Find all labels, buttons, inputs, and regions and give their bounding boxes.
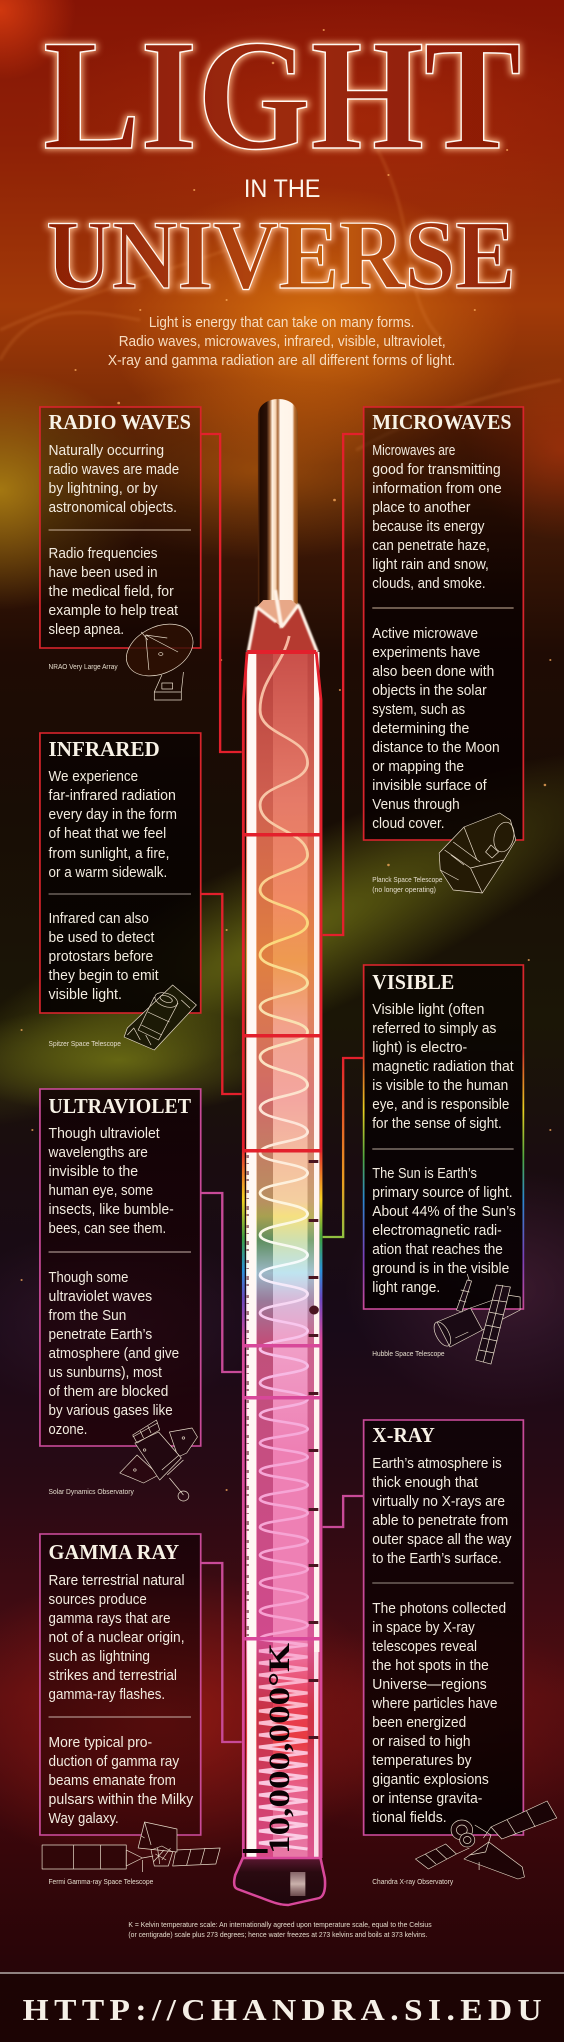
panel: radio waves — [40, 407, 203, 700]
text block: magnetic radiation that — [372, 1059, 514, 1075]
text block — [372, 443, 514, 832]
text block: far-infrared radiation — [49, 788, 176, 804]
text block: astronomical objects. — [49, 500, 177, 516]
icon: Fermi telescope — [42, 1822, 220, 1872]
base highlight — [290, 1872, 305, 1896]
text block — [371, 1456, 514, 1826]
heading: MICROWAVES — [372, 411, 511, 434]
heading: GAMMA RAY — [49, 1541, 179, 1564]
text block: gamma-ray flashes. — [49, 1687, 165, 1703]
intro text: Radio waves, microwaves, infrared, visible, ultraviolet, — [119, 334, 446, 350]
panel: ultraviolet — [40, 1089, 201, 1501]
thermometer with wave — [234, 399, 325, 1905]
text block: be used to detect — [49, 930, 155, 946]
scale tick — [243, 1849, 268, 1853]
text block: light) is electro- — [372, 1040, 467, 1056]
text block: Active microwave — [372, 626, 478, 642]
text block: able to penetrate from — [372, 1513, 508, 1529]
text block: ozone. — [49, 1422, 87, 1438]
text block: primary source of light. — [372, 1185, 513, 1201]
text block: Universe—regions — [372, 1677, 487, 1693]
text block: us sunburns), most — [49, 1365, 162, 1381]
text block: distance to the Moon — [372, 740, 500, 756]
heading: INFRARED — [49, 738, 160, 761]
intro text: X-ray and gamma radiation are all different forms of light. — [108, 353, 455, 369]
icon: Solar Dynamics Observatory — [120, 1420, 197, 1501]
panel: visible — [364, 965, 523, 1364]
text block: clouds, and smoke. — [372, 576, 486, 592]
title: IN THE: IN THE — [244, 174, 320, 203]
text block: Radio frequencies — [49, 546, 158, 562]
text block: every day in the form — [49, 807, 177, 823]
heading: ULTRAVIOLET — [49, 1095, 191, 1118]
text block: wavelengths are — [48, 1145, 148, 1161]
text block: system, such as — [372, 702, 465, 718]
text block: Way galaxy. — [49, 1811, 119, 1827]
text block: sleep apnea. — [49, 622, 124, 638]
text block: The Sun is Earth’s — [372, 1166, 477, 1182]
text block: or raised to high — [372, 1734, 470, 1750]
text block: penetrate Earth’s — [49, 1327, 152, 1343]
text block: because its energy — [372, 519, 485, 535]
text block — [49, 1573, 193, 1827]
connectors — [201, 434, 364, 1742]
caption: Spitzer Space Telescope — [49, 1039, 121, 1048]
intro text — [108, 315, 455, 369]
text block: the hot spots in the — [372, 1658, 489, 1674]
text block: human eye, some — [49, 1183, 153, 1199]
text block: where particles have — [371, 1696, 497, 1712]
panel: microwaves — [364, 407, 523, 894]
text block: strikes and terrestrial — [49, 1668, 177, 1684]
text block: gamma rays that are — [49, 1611, 170, 1627]
panel: x-ray — [364, 1420, 557, 1886]
caption: Fermi Gamma-ray Space Telescope — [49, 1877, 153, 1886]
text block: referred to simply as — [372, 1021, 497, 1037]
text block: More typical pro- — [49, 1735, 152, 1751]
text block: duction of gamma ray — [49, 1754, 179, 1770]
thermometer ticks — [309, 1160, 319, 1739]
text block: The photons collected — [372, 1601, 506, 1617]
text block: atmosphere (and give — [49, 1346, 179, 1362]
footer url: HTTP://CHANDRA.SI.EDU — [23, 1992, 542, 2027]
text block: visible light. — [49, 987, 122, 1003]
text block: from the Sun — [49, 1308, 126, 1324]
text block: also been done with — [372, 664, 494, 680]
text block: by lightning, or by — [49, 481, 158, 497]
tube outline — [243, 652, 321, 1858]
heading: VISIBLE — [372, 971, 454, 994]
text block: Microwaves are — [372, 443, 455, 459]
text block: Venus through — [372, 797, 460, 813]
text block: to the Earth’s surface. — [372, 1551, 502, 1567]
thermometer base — [234, 1858, 325, 1905]
text block: not of a nuclear origin, — [49, 1630, 185, 1646]
text block: light rain and snow, — [372, 557, 489, 573]
text block: good for transmitting — [372, 462, 501, 478]
icon: radio dish — [116, 614, 203, 700]
text block: bees, can see them. — [49, 1221, 166, 1237]
text block: place to another — [372, 500, 470, 516]
dense wave teeth — [259, 1639, 308, 1849]
caption: NRAO Very Large Array — [49, 662, 118, 671]
text block: invisible surface of — [372, 778, 487, 794]
panel: gamma ray — [40, 1534, 220, 1886]
text block: information from one — [372, 481, 502, 497]
caption: Solar Dynamics Observatory — [49, 1487, 134, 1496]
icon: Chandra observatory — [415, 1801, 557, 1879]
text block: thick enough that — [372, 1475, 479, 1491]
text block: virtually no X-rays are — [372, 1494, 505, 1510]
icon: Hubble telescope — [431, 1274, 520, 1364]
text block — [49, 443, 191, 638]
text block: ultraviolet waves — [49, 1289, 152, 1305]
scale bars — [243, 650, 322, 1640]
text block: have been used in — [49, 565, 158, 581]
text block: can penetrate haze, — [372, 538, 490, 554]
text block: ground is in the visible — [372, 1261, 509, 1277]
temperature label: 10,000,000°K — [264, 1643, 296, 1854]
caption — [372, 875, 442, 894]
text block — [372, 1002, 516, 1296]
text block: insects, like bumble- — [49, 1202, 174, 1218]
thermometer top bulb — [248, 399, 317, 652]
text block: is visible to the human — [372, 1078, 508, 1094]
text block: objects in the solar — [372, 683, 487, 699]
text block: Visible light (often — [372, 1002, 485, 1018]
text block: We experience — [49, 769, 138, 785]
text block: they begin to emit — [49, 968, 159, 984]
text block: protostars before — [49, 949, 153, 965]
text block: light range. — [372, 1280, 440, 1296]
intro text: Light is energy that can take on many forms. — [149, 315, 414, 331]
text block: or mapping the — [372, 759, 464, 775]
heading: X-RAY — [372, 1424, 435, 1447]
text block: example to help treat — [49, 603, 179, 619]
text block: been energized — [372, 1715, 466, 1731]
footnote — [128, 1920, 432, 1939]
text block: tional fields. — [372, 1810, 447, 1826]
caption: (no longer operating) — [372, 885, 436, 894]
text block: Though some — [49, 1270, 128, 1286]
footnote: (or centigrade) scale plus 273 degrees; hence water freezes at 273 kelvins and boils at 373 kelvins. — [128, 1930, 427, 1939]
text block: of them are blocked — [49, 1384, 168, 1400]
text block: beams emanate from — [49, 1773, 176, 1789]
text block: in space by X-ray — [372, 1620, 475, 1636]
text block: telescopes reveal — [372, 1639, 477, 1655]
footnote: K = Kelvin temperature scale: An internationally agreed upon temperature scale, equal to the Celsius — [128, 1920, 432, 1929]
caption: Hubble Space Telescope — [372, 1349, 445, 1358]
text block: of heat that we feel — [49, 826, 166, 842]
text block — [49, 769, 191, 1003]
text block: Naturally occurring — [49, 443, 164, 459]
text block: Infrared can also — [49, 911, 149, 927]
text block: or a warm sidewalk. — [49, 865, 167, 881]
text block: experiments have — [372, 645, 480, 661]
text block: electromagnetic radi- — [372, 1223, 502, 1239]
text block: eye, and is responsible — [372, 1097, 509, 1113]
text block: About 44% of the Sun’s — [372, 1204, 516, 1220]
panel: infrared — [40, 733, 201, 1050]
icon: Spitzer telescope — [124, 985, 196, 1050]
text block: radio waves are made — [49, 462, 179, 478]
text block: cloud cover. — [372, 816, 445, 832]
text block: Rare terrestrial natural — [49, 1573, 185, 1589]
footer band — [0, 1972, 564, 2042]
text block: or intense gravita- — [372, 1791, 482, 1807]
text block: ation that reaches the — [372, 1242, 503, 1258]
text block: the medical field, for — [49, 584, 174, 600]
text block: Earth’s atmosphere is — [372, 1456, 502, 1472]
text block: by various gases like — [49, 1403, 173, 1419]
text block — [48, 1126, 191, 1438]
text block: invisible to the — [49, 1164, 138, 1180]
caption: Planck Space Telescope — [372, 875, 442, 884]
heading: RADIO WAVES — [49, 411, 191, 434]
text block: sources produce — [49, 1592, 147, 1608]
text block: determining the — [372, 721, 469, 737]
text block: such as lightning — [49, 1649, 150, 1665]
text block: pulsars within the Milky — [49, 1792, 193, 1808]
text block: gigantic explosions — [372, 1772, 489, 1788]
text block: outer space all the way — [372, 1532, 512, 1548]
caption: Chandra X-ray Observatory — [372, 1877, 454, 1886]
text block: from sunlight, a fire, — [49, 846, 169, 862]
text block: for the sense of sight. — [372, 1116, 502, 1132]
icon: Planck telescope — [439, 813, 517, 893]
sine wave — [260, 636, 308, 1639]
text block: temperatures by — [372, 1753, 472, 1769]
tube interior — [246, 652, 319, 1864]
text block: Though ultraviolet — [49, 1126, 160, 1142]
